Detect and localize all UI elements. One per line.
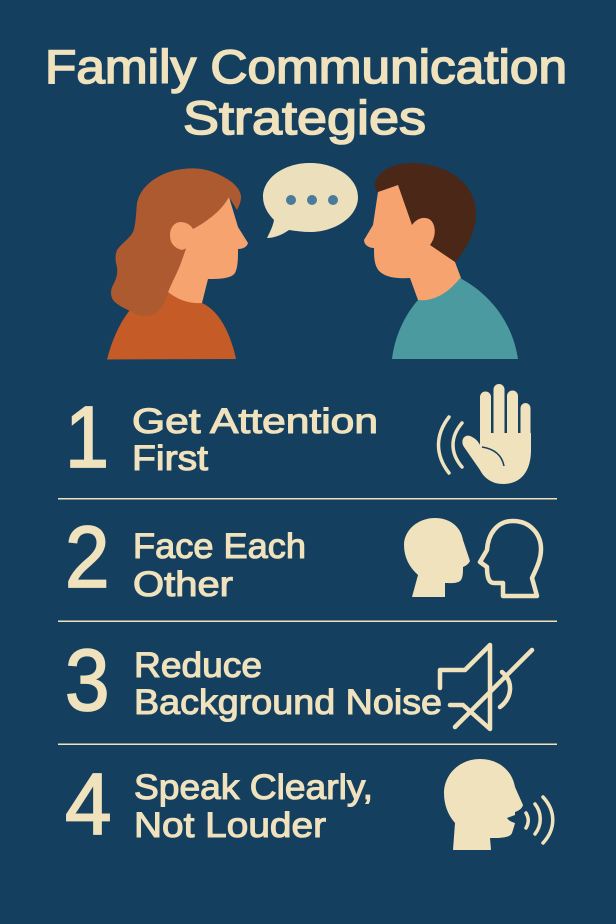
label: reduce background noise: Reduce bbox=[134, 646, 262, 685]
title: Strategies bbox=[183, 91, 426, 144]
title: Family Communication bbox=[45, 40, 567, 93]
icon: speaking head with sound waves bbox=[444, 759, 553, 850]
step 1 bbox=[65, 389, 531, 486]
label: get attention first: Get Attention bbox=[132, 402, 378, 441]
divider bbox=[58, 620, 557, 622]
label: face each other: Other bbox=[133, 565, 233, 604]
step 3 bbox=[65, 632, 532, 729]
speech bubble bbox=[263, 163, 358, 238]
number 2: 2 bbox=[65, 509, 110, 606]
icon: muted speaker bbox=[440, 645, 532, 729]
number 4: 4 bbox=[65, 756, 112, 853]
illustration: two people talking bbox=[107, 163, 518, 360]
divider bbox=[58, 744, 557, 745]
number 3: 3 bbox=[65, 632, 110, 729]
label: speak clearly, not louder: Speak Clearly, bbox=[134, 768, 373, 807]
icon: filled head bbox=[404, 518, 470, 597]
label: get attention first: First bbox=[132, 439, 208, 478]
title bbox=[45, 40, 567, 144]
icon: outlined head bbox=[480, 521, 541, 596]
label: reduce background noise: Background Noise bbox=[134, 683, 442, 722]
divider bbox=[58, 498, 557, 500]
woman bbox=[107, 168, 248, 360]
icon: raised hand with sound waves bbox=[438, 390, 531, 484]
number 1: 1 bbox=[65, 389, 109, 486]
step 4 bbox=[65, 756, 553, 853]
label: face each other: Face Each bbox=[133, 527, 306, 566]
label: get attention first bbox=[132, 402, 378, 478]
label: reduce background noise bbox=[134, 646, 442, 722]
step 2 bbox=[65, 509, 541, 606]
label: speak clearly, not louder: Not Louder bbox=[134, 806, 326, 845]
man bbox=[364, 163, 518, 359]
label: speak clearly, not louder bbox=[134, 768, 373, 845]
label: face each other bbox=[133, 527, 306, 604]
